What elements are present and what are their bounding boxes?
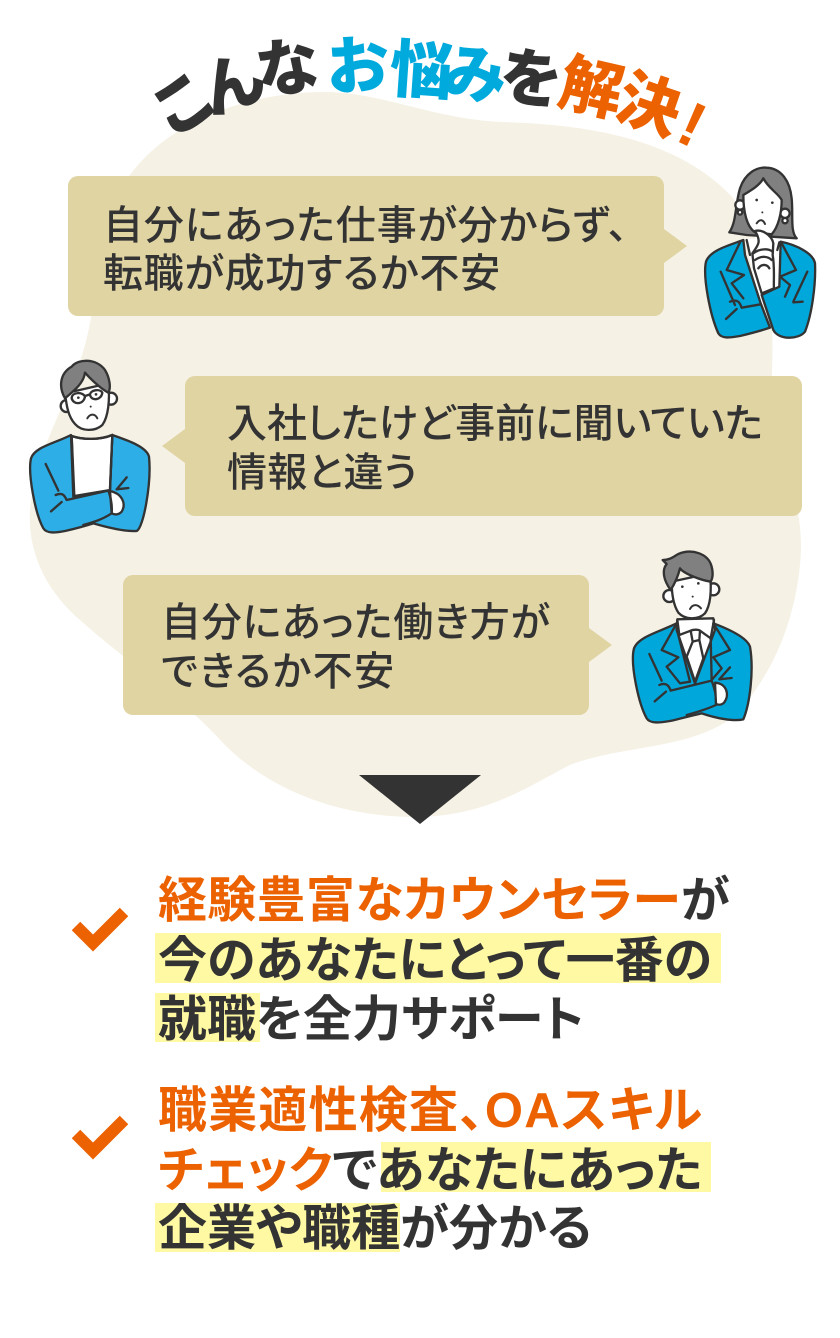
benefit text 2 — [155, 1084, 711, 1256]
speech bubble 3 — [123, 575, 612, 715]
speech bubble 2: 入社したけど事前に聞いていた — [227, 402, 763, 446]
title: み — [440, 38, 510, 114]
benefit text 1: 経験豊富なカウンセラーが — [158, 874, 730, 928]
speech bubble 1 — [68, 176, 687, 316]
benefit text 1 — [155, 874, 730, 1047]
speech bubble 1: 自分にあった仕事が分からず、 — [103, 204, 629, 248]
title: ! — [668, 89, 716, 161]
title — [138, 30, 716, 161]
benefit text 1: 今のあなたにとって一番の — [158, 934, 712, 988]
title: お — [325, 30, 391, 104]
speech bubble 1: 転職が成功するか不安 — [103, 252, 501, 296]
speech bubble 2 — [162, 376, 802, 516]
title: を — [495, 41, 567, 119]
title: 悩 — [387, 35, 455, 109]
icon: check 2 — [72, 1116, 128, 1160]
title: 決 — [608, 63, 690, 149]
benefit text 2: 企業や職種が分かる — [158, 1202, 592, 1256]
speech bubble 2: 情報と違う — [227, 451, 417, 495]
icon: worried woman — [704, 166, 816, 339]
speech bubble 3: 自分にあった働き方が — [161, 601, 551, 645]
icon: check 1 — [72, 908, 128, 952]
icon: man with glasses — [28, 360, 151, 534]
title: ん — [191, 41, 275, 129]
benefit text 2: チェックであなたにあった — [158, 1144, 702, 1198]
benefit text 2: 職業適性検査、OAスキル — [158, 1084, 703, 1138]
title: こ — [138, 58, 230, 152]
title: 解 — [552, 48, 630, 130]
benefit text 1: 就職を全力サポート — [158, 993, 584, 1047]
speech bubble 3: できるか不安 — [161, 650, 396, 694]
down arrow — [359, 775, 481, 824]
icon: man in suit — [632, 550, 753, 724]
title: な — [251, 30, 325, 108]
